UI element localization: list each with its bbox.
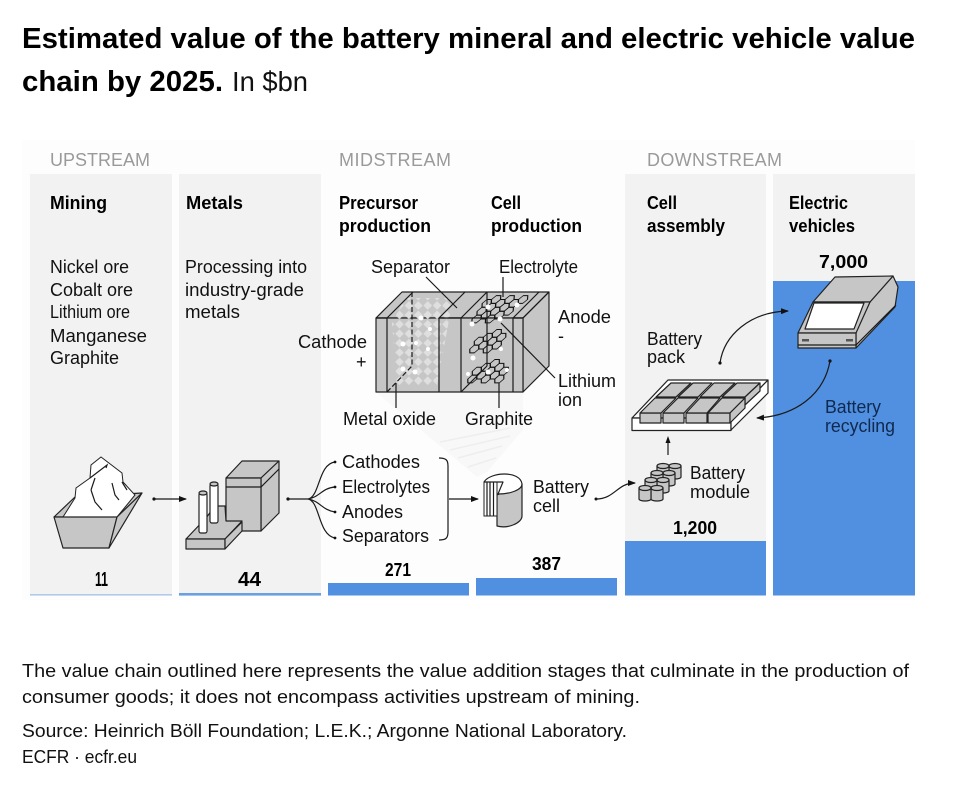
- stage headings: UPSTREAM: [50, 150, 150, 170]
- chart background: [22, 140, 915, 600]
- text: battery module label: [690, 463, 750, 502]
- column headings: [50, 193, 855, 236]
- column headings: Mining: [50, 193, 107, 213]
- text: battery module label: Battery: [690, 463, 745, 483]
- arrow: module to pack: [666, 436, 670, 455]
- values: 44: [238, 569, 262, 591]
- text: battery pack label: [647, 329, 702, 367]
- text: precursor products: Electrolytes: [342, 477, 430, 497]
- arrow: mining to metals: [152, 497, 186, 501]
- text: battery pack label: Battery: [647, 329, 702, 349]
- stage headings: DOWNSTREAM: [647, 150, 782, 170]
- diagram leader lines: [396, 277, 555, 408]
- bar: cell production value: [476, 578, 617, 596]
- text: battery cell label: cell: [533, 496, 560, 516]
- source: ECFR · ecfr.eu: [22, 747, 137, 767]
- column headings: production: [339, 216, 431, 236]
- panel: cell assembly: [625, 174, 766, 596]
- diagram labels: Lithium: [558, 371, 616, 391]
- icon: battery module: [639, 464, 681, 501]
- text: precursor products: Cathodes: [342, 452, 420, 472]
- title: Estimated value of the battery mineral and electric vehicle value: [22, 23, 915, 55]
- diagram labels: Anode: [558, 307, 611, 327]
- bar: cell assembly value: [625, 541, 766, 596]
- footnote: The value chain outlined here represents the value addition stages that culminate in the production of: [22, 661, 910, 681]
- bar: metals value: [179, 593, 321, 596]
- text: metals description: metals: [185, 302, 240, 322]
- text: battery recycling label: recycling: [825, 416, 895, 436]
- diagram labels: Metal oxide: [343, 409, 436, 429]
- text: mining materials: Manganese: [50, 326, 147, 346]
- diamond-textured cathode material: [392, 298, 453, 386]
- icon: mining cart with ore: [54, 457, 142, 548]
- icon: metals factory: [186, 461, 279, 549]
- text: precursor products: [342, 452, 430, 546]
- footnote: [22, 661, 910, 707]
- values: 11: [95, 569, 108, 591]
- chimneys: [199, 482, 218, 533]
- values: 387: [532, 554, 561, 574]
- title: [22, 23, 915, 98]
- column headings: assembly: [647, 216, 725, 236]
- diagram labels: +: [356, 352, 367, 372]
- panel: metals: [179, 174, 321, 596]
- text: metals description: [185, 257, 307, 322]
- arrow: battery cell to module: [594, 483, 635, 500]
- arrow: bracket to battery cell: [439, 458, 478, 540]
- text: mining materials: Cobalt ore: [50, 280, 133, 300]
- arrow: pack to vehicle: [718, 311, 788, 365]
- source: [22, 721, 627, 767]
- text: battery module label: module: [690, 482, 750, 502]
- hexagon graphite layers: [466, 296, 530, 383]
- column headings: Metals: [186, 193, 243, 213]
- icon: electric vehicle: [798, 276, 898, 348]
- icon: battery pack: [632, 380, 768, 430]
- bar: mining value: [30, 594, 172, 596]
- values: 7,000: [819, 252, 868, 272]
- values: 1,200: [673, 518, 717, 538]
- diagram labels: Electrolyte: [499, 257, 578, 277]
- diagram labels: [298, 257, 616, 429]
- text: mining materials: Lithium ore: [50, 302, 130, 322]
- text: mining materials: [50, 257, 147, 368]
- values: [95, 252, 868, 591]
- text: precursor products: Anodes: [342, 502, 403, 522]
- bar: electric vehicles value: [773, 281, 915, 596]
- source: Source: Heinrich Böll Foundation; L.E.K.; Argonne National Laboratory.: [22, 721, 627, 741]
- diagram labels: Graphite: [465, 409, 533, 429]
- column headings: vehicles: [789, 216, 855, 236]
- title: In $bn: [232, 66, 308, 97]
- front row of cells: [640, 398, 745, 423]
- column headings: Cell: [491, 193, 521, 213]
- diagram labels: Separator: [371, 257, 450, 277]
- diagram labels: Cathode: [298, 332, 367, 352]
- text: precursor products: Separators: [342, 526, 429, 546]
- footnote: consumer goods; it does not encompass activities upstream of mining.: [22, 687, 640, 707]
- stage headings: MIDSTREAM: [339, 150, 451, 170]
- arrow: vehicle recycling to pack: [757, 359, 832, 418]
- windscreen: [805, 303, 864, 329]
- text: battery recycling label: [825, 397, 895, 436]
- text: battery cell label: [533, 477, 589, 516]
- back row of cells: [656, 383, 760, 405]
- text: metals description: Processing into: [185, 257, 307, 277]
- lithium ions: [400, 302, 520, 376]
- text: mining materials: Graphite: [50, 348, 119, 368]
- text: metals description: industry-grade: [185, 280, 304, 300]
- title: chain by 2025.: [22, 66, 223, 98]
- panel: electric vehicles: [773, 174, 915, 596]
- arrow: metals branching to precursor products: [286, 461, 336, 539]
- text: battery recycling label: Battery: [825, 397, 881, 417]
- icon: battery cell: [484, 474, 522, 527]
- icon: battery cell cross-section: [376, 292, 549, 392]
- diagram labels: -: [558, 326, 564, 346]
- diagram labels: ion: [558, 390, 582, 410]
- column headings: production: [491, 216, 582, 236]
- column headings: Electric: [789, 193, 848, 213]
- text: battery pack label: pack: [647, 347, 686, 367]
- values: 271: [385, 560, 411, 580]
- panel: mining: [30, 174, 172, 596]
- fan linking cell diagram to battery cell: [376, 392, 523, 477]
- bar: precursor production value: [328, 583, 469, 596]
- stage headings: [50, 150, 782, 170]
- column headings: Precursor: [339, 193, 418, 213]
- column headings: Cell: [647, 193, 677, 213]
- text: battery cell label: Battery: [533, 477, 589, 497]
- text: mining materials: Nickel ore: [50, 257, 129, 277]
